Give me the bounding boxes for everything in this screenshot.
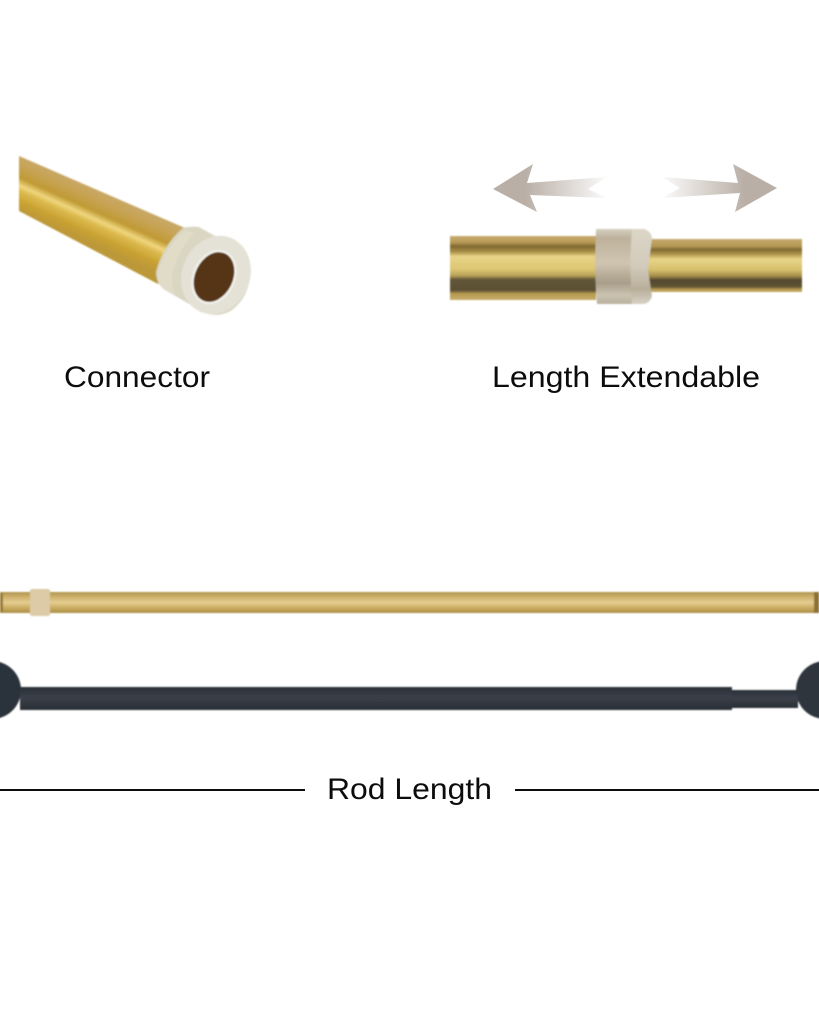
thick rod section xyxy=(20,687,732,710)
gold tube xyxy=(19,156,185,284)
left dimension line xyxy=(0,789,305,791)
gold rod xyxy=(0,589,819,616)
extension arrows xyxy=(493,164,777,212)
right dimension line xyxy=(515,789,819,791)
left arrow xyxy=(493,164,607,212)
gold rod left end xyxy=(0,593,3,612)
thin rod section xyxy=(730,690,798,708)
connector rod image xyxy=(19,156,263,325)
cap front face xyxy=(169,225,263,325)
translucent cap xyxy=(156,227,250,315)
gold rod right end xyxy=(814,592,819,613)
rod length label: Rod Length xyxy=(327,773,492,806)
cap opening xyxy=(183,243,245,311)
collar xyxy=(595,229,632,304)
left wall bracket xyxy=(0,661,21,719)
right tube xyxy=(648,239,802,292)
label: connector: Connector xyxy=(64,361,210,394)
black rod xyxy=(0,661,819,719)
right arrow xyxy=(662,164,777,212)
right wall bracket xyxy=(796,661,819,719)
left tube xyxy=(450,236,596,300)
label: length extendable: Length Extendable xyxy=(492,361,760,394)
extendable rod image xyxy=(450,229,802,304)
gold rod collar xyxy=(30,589,50,616)
